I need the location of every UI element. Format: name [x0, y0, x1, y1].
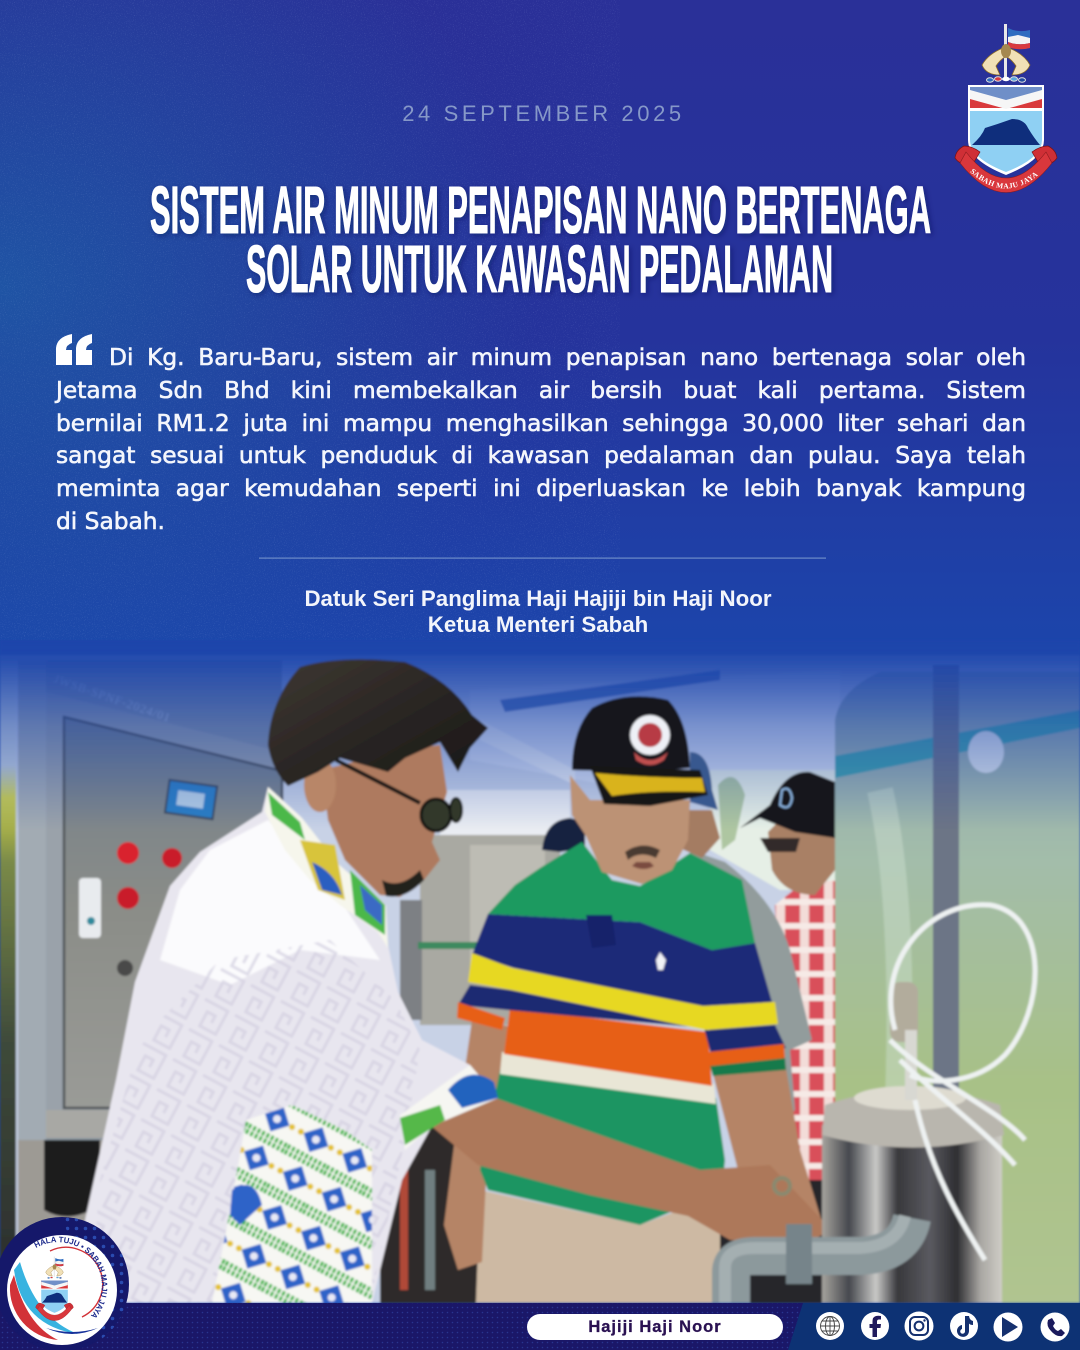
beard	[382, 870, 424, 897]
icon: TikTok	[950, 1312, 978, 1340]
polo navy stripes	[458, 985, 786, 1058]
right arm	[712, 1062, 822, 1222]
quote body text: Jetama Sdn Bhd kini membekalkan air bersih buat kali pertama. Sistem	[56, 377, 1026, 404]
shirt highlight	[160, 820, 380, 985]
polo yellow stripes	[468, 953, 778, 1030]
cabinet serial plate: JWSB-SPNF-2024/01	[52, 672, 172, 725]
icon: YouTube play	[994, 1312, 1022, 1342]
name pill	[527, 1314, 783, 1340]
glasses	[336, 760, 420, 803]
attribution: Datuk Seri Panglima Haji Hajiji bin Haji Noor	[304, 586, 772, 611]
bottom bar	[0, 1303, 1080, 1350]
icon: Facebook	[861, 1312, 889, 1340]
batik panel	[212, 1105, 372, 1303]
shirt	[85, 787, 498, 1303]
polo navy chest	[472, 914, 772, 1008]
white hoses	[890, 905, 1035, 1260]
title	[150, 173, 931, 307]
date: 24 SEPTEMBER 2025	[402, 101, 685, 126]
photo backdrop and ceiling	[0, 655, 1080, 1303]
steel cabinet	[18, 660, 282, 1303]
ribbon motto: SABAH MAJU JAYA	[970, 168, 1038, 188]
man in batik shirt	[85, 659, 832, 1303]
polo orange stripe	[504, 1008, 712, 1086]
collar	[265, 787, 388, 948]
icon: website globe	[816, 1312, 844, 1340]
social icons	[816, 1312, 1070, 1342]
circular badge: Hala Tuju Sabah Maju Jaya	[0, 1217, 129, 1348]
man in striped polo and cap	[444, 696, 822, 1303]
cap gold braid	[595, 773, 705, 796]
sleeve cuff	[400, 1065, 498, 1150]
name pill: Hajiji Haji Noor	[588, 1318, 722, 1336]
icon: opening quotation mark	[56, 334, 92, 365]
attribution: Ketua Menteri Sabah	[428, 612, 648, 637]
polo green collar and shoulders	[488, 842, 755, 950]
quote body text: meminta agar kemudahan seperti ini diperluaskan ke lebih banyak kampung	[56, 475, 1026, 502]
quote body text: bernilai RM1.2 juta ini mampu menghasilkan sehingga 30,000 liter sehari dan	[56, 410, 1026, 437]
cap crown	[572, 696, 690, 772]
quote body text: sangat sesuai untuk penduduk di kawasan pedalaman dan pulau. Saya telah	[56, 442, 1026, 469]
cap brim	[590, 766, 708, 806]
background equipment tanks	[380, 835, 835, 1303]
left outdoor strip beside the cabinet	[0, 655, 16, 1303]
icon: Instagram	[904, 1312, 934, 1340]
large green filter tank with pole	[835, 665, 1080, 1303]
small Sabah crest	[36, 1257, 73, 1321]
hair	[268, 659, 488, 786]
shirt woven pattern	[90, 940, 420, 1303]
quote body text: di Sabah.	[56, 508, 165, 535]
cap badge	[630, 715, 670, 755]
quote body text: Di Kg. Baru-Baru, sistem air minum penapisan nano bertenaga solar oleh	[109, 344, 1026, 371]
trousers	[476, 1190, 720, 1303]
stainless filter housing	[822, 982, 1004, 1303]
lower-left blue batik mark	[230, 1185, 262, 1225]
face	[570, 775, 690, 884]
reaching forearm	[430, 1098, 832, 1246]
polo body green	[480, 1070, 725, 1225]
fade from page blue into photo	[0, 640, 1080, 830]
grey PVC pipes	[725, 1216, 912, 1303]
divider	[259, 558, 826, 559]
small navy cap behind	[542, 818, 585, 852]
sleeve orange and green trims	[457, 1002, 785, 1068]
state crest of Sabah	[954, 24, 1058, 193]
neck and face	[322, 745, 447, 897]
icon: telephone	[1040, 1312, 1070, 1342]
quote body text	[54, 344, 1026, 535]
polo white stripe	[500, 1052, 716, 1104]
man in grey shirt and blue cap	[678, 752, 812, 1160]
man in red plaid and black cap	[740, 772, 835, 1180]
attribution	[304, 586, 772, 637]
badge arc text: HALA TUJU • SABAH MAJU JAYA	[34, 1236, 108, 1318]
photo: officials inspecting water filtration system	[0, 640, 1080, 1303]
left arm	[444, 1020, 508, 1270]
ear	[304, 758, 336, 812]
